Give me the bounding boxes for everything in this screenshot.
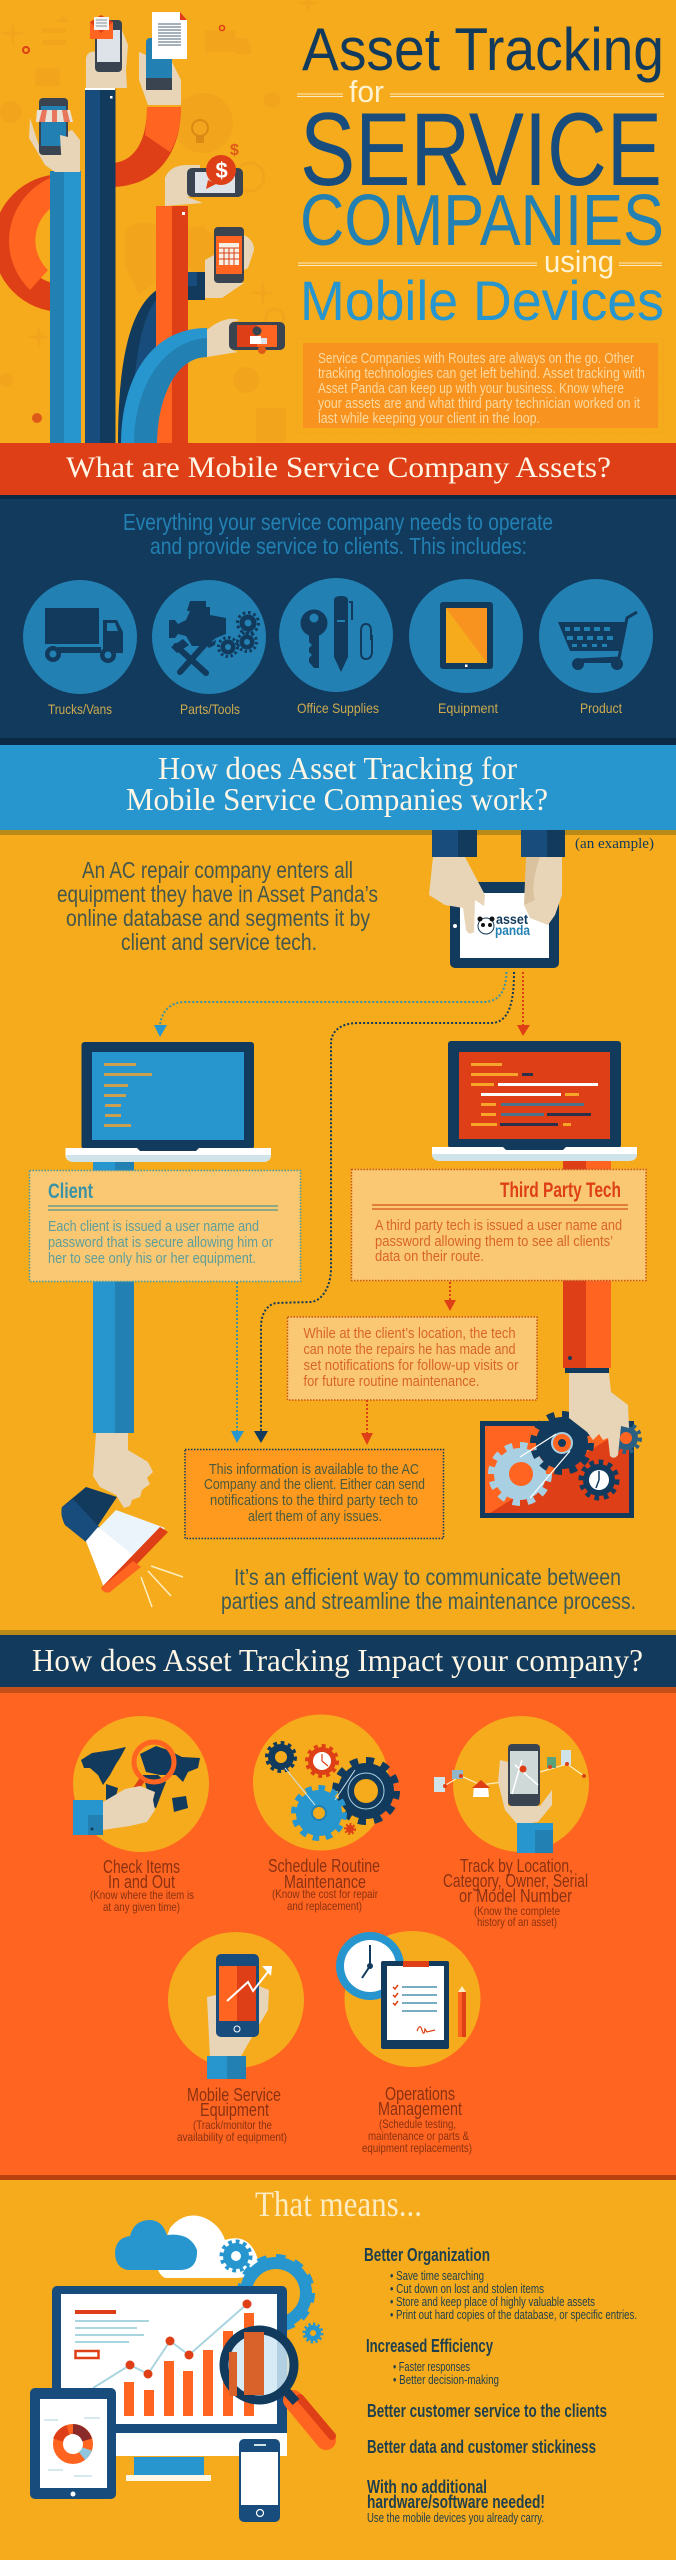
label: track by location: Category, Owner, Serial	[443, 1871, 588, 1891]
label: check items: (Know where the item is	[90, 1888, 194, 1902]
panel: third party tech box: A third party tech is issued a user name and	[375, 1217, 622, 1234]
arrow: tablet to client	[154, 972, 506, 1037]
panel: client box: Client	[48, 1180, 93, 1203]
label: operations management: Operations	[385, 2084, 455, 2104]
icon: tracking phone	[434, 1716, 589, 1853]
label: mobile service equipment: (Track/monitor the	[193, 2118, 272, 2132]
panel: how it works heading band: Mobile Service Companies work?	[126, 781, 548, 817]
icon: clouds and gears	[115, 2216, 322, 2342]
label: schedule maintenance	[268, 1856, 380, 1913]
panel: intro text box: last while keeping your client in the loop.	[318, 411, 540, 427]
text: assets intro: Everything your service company needs to operate	[123, 509, 553, 535]
icon: curved blue arm front	[121, 328, 207, 444]
panel: intro text box	[297, 339, 663, 433]
label: operations management: equipment replacements)	[362, 2141, 472, 2155]
text: better organization: • Store and keep place of highly valuable assets	[390, 2294, 595, 2309]
icon: hands on tablet with logo	[429, 830, 565, 968]
labels: asset names: Product	[580, 700, 622, 716]
text: increased efficiency: • Better decision-making	[393, 2372, 499, 2387]
panel: how it works heading band: How does Asset Tracking for	[158, 750, 517, 786]
icon: hands on tablet with logo: asset	[496, 911, 528, 927]
labels: asset names	[48, 700, 622, 717]
icon: phone with dollar bubble	[165, 155, 243, 206]
label: track by location: history of an asset)	[477, 1915, 557, 1929]
labels: impact items	[90, 1856, 588, 2155]
text: no additional hardware: Use the mobile devices you already carry.	[367, 2510, 544, 2525]
text: example note: (an example)	[575, 836, 654, 852]
panel: technician notes box	[288, 1317, 537, 1400]
panel: shared information box: alert them of any issues.	[248, 1508, 382, 1525]
label: track by location	[443, 1856, 588, 1929]
icon: office supplies	[279, 578, 393, 692]
text: better organization: Better Organization	[364, 2245, 490, 2265]
icon: clock and clipboard	[336, 1931, 480, 2067]
panel: third party tech box: password allowing them to see all clients’	[375, 1233, 613, 1250]
text: no additional hardware: hardware/software needed!	[367, 2492, 545, 2512]
panel: how it works heading band	[0, 745, 676, 835]
label: operations management: Management	[378, 2099, 462, 2119]
icon: phone with document	[139, 12, 187, 105]
title	[297, 16, 664, 332]
icon: gears	[253, 1714, 396, 1850]
icon: parts and tools	[152, 580, 266, 694]
label: schedule maintenance: and replacement)	[287, 1899, 362, 1913]
heading: for with rules: for	[349, 74, 384, 109]
icon: magnifier	[224, 2330, 332, 2440]
heading: using with rules: using	[544, 244, 614, 279]
panel: shared information box: Company and the client. Either can send	[204, 1476, 425, 1493]
text: intro paragraph: An AC repair company enters all	[82, 857, 353, 883]
icon: navy curved arm	[118, 272, 205, 444]
label: check items: at any given time)	[103, 1900, 180, 1914]
icon: arm two navy	[85, 88, 116, 444]
illustration: hands holding phones	[0, 12, 285, 444]
panel: technician notes box: for future routine maintenance.	[304, 1373, 480, 1390]
panel: technician notes box: While at the client’s location, the tech	[304, 1325, 516, 1342]
text: better organization: • Save time searching	[390, 2268, 484, 2283]
label: track by location: or Model Number	[459, 1886, 572, 1906]
label: operations management: (Schedule testing,	[379, 2117, 456, 2131]
panel: client box	[30, 1170, 300, 1282]
text: closing statement: It’s an efficient way to communicate between	[234, 1564, 621, 1590]
text: no additional hardware: With no additional	[367, 2477, 487, 2497]
heading: that means: That means...	[255, 2184, 422, 2224]
arrow: third party to notes	[444, 1282, 456, 1311]
icon: phone with calculator	[205, 227, 254, 298]
panel: that means	[0, 2175, 676, 2560]
panel: shared information box: notifications to the third party tech to	[210, 1492, 418, 1509]
labels: asset names: Office Supplies	[297, 700, 379, 716]
text: increased efficiency: • Faster responses	[393, 2359, 470, 2374]
label: check items: In and Out	[108, 1872, 175, 1892]
panel: third party tech box: Third Party Tech	[500, 1179, 621, 1202]
panel: client box: password that is secure allowing him or	[48, 1234, 273, 1251]
text: no additional hardware	[367, 2477, 545, 2525]
icon: tablet with donut	[30, 2388, 116, 2499]
icon: third party laptop	[432, 1041, 637, 1161]
icon: mobile phone with growth	[168, 1932, 304, 2079]
panel: third party tech box: data on their route.	[375, 1248, 484, 1265]
icon: hands on tablet with logo: panda	[495, 922, 530, 938]
label: mobile service equipment: Mobile Service	[187, 2085, 281, 2105]
label: track by location: (Know the complete	[474, 1904, 560, 1918]
label: check items	[90, 1857, 194, 1914]
icon: red curved arm top	[110, 107, 181, 187]
text: better organization: • Cut down on lost and stolen items	[390, 2281, 544, 2296]
arm: third party sleeve	[563, 1161, 611, 1373]
panel: header background	[0, 0, 676, 444]
arrow: client box to shared box	[231, 1282, 244, 1443]
icon: hand with megaphone	[61, 1433, 183, 1607]
heading: Mobile Devices: Mobile Devices	[300, 269, 664, 332]
label: operations management	[362, 2084, 472, 2155]
panel: assets heading band: What are Mobile Service Company Assets?	[66, 451, 611, 484]
arrow: tablet to shared box	[254, 972, 514, 1443]
text: increased efficiency	[366, 2336, 499, 2387]
label: mobile service equipment: Equipment	[200, 2100, 269, 2120]
labels: asset names: Equipment	[438, 700, 498, 716]
text: increased efficiency: Increased Efficiency	[366, 2336, 493, 2356]
label: schedule maintenance: (Know the cost for repair	[272, 1887, 378, 1901]
label: mobile service equipment	[177, 2085, 287, 2144]
panel: shared information box: This information is available to the AC	[209, 1461, 419, 1478]
text: better organization	[364, 2245, 637, 2322]
icon: arm one blue	[50, 171, 81, 444]
text: intro paragraph	[57, 857, 378, 955]
icon: client laptop	[66, 1042, 271, 1162]
panel: technician notes box: can note the repairs he has made and	[304, 1341, 516, 1358]
panel: how it works	[0, 830, 676, 1630]
panel: technician notes box: set notifications for follow-up visits or	[304, 1357, 519, 1374]
panel: third party tech box	[352, 1170, 646, 1280]
panel: impact	[0, 1693, 676, 2175]
panel: client box: her to see only his or her equipment.	[48, 1250, 256, 1267]
labels: asset names: Trucks/Vans	[48, 701, 112, 717]
icon: truck	[23, 580, 137, 694]
arrow: tablet to third party	[517, 972, 530, 1036]
text: closing statement	[221, 1564, 636, 1614]
panel: shared information box	[185, 1450, 444, 1538]
label: schedule maintenance: Schedule Routine	[268, 1856, 380, 1876]
label: schedule maintenance: Maintenance	[284, 1872, 366, 1892]
panel: impact heading band	[0, 1630, 676, 1693]
icon: phone with envelope	[86, 15, 128, 88]
text: assets intro	[123, 509, 553, 559]
icon: lightbulb and dollar	[23, 26, 266, 423]
icon: arm three orange	[156, 206, 188, 444]
icon: shopping cart	[539, 579, 653, 693]
icon: monitor with chart	[52, 2286, 287, 2481]
icon: phone with truck	[207, 319, 285, 357]
panel: client box: Each client is issued a user name and	[48, 1218, 259, 1235]
icon: phone with market	[29, 98, 80, 172]
icon: world map with magnifier	[73, 1716, 209, 1852]
icon: phone with dollar bubble: $	[216, 158, 228, 183]
panel: assets heading band	[0, 443, 676, 495]
text: better data: Better data and customer stickiness	[367, 2437, 596, 2457]
arm: client sleeve	[93, 1162, 134, 1433]
label: mobile service equipment: availability of equipment)	[177, 2130, 287, 2144]
icon: tablet	[409, 579, 523, 693]
label: check items: Check Items	[103, 1857, 180, 1877]
arrow: notes to shared box	[361, 1400, 373, 1445]
icon: lightbulb and dollar: $	[230, 142, 239, 159]
panel: impact heading band: How does Asset Tracking Impact your company?	[32, 1642, 643, 1678]
text: intro paragraph: online database and segments it by	[66, 905, 370, 931]
icon: phone	[239, 2439, 280, 2522]
text: intro paragraph: equipment they have in Asset Panda’s	[57, 881, 378, 907]
panel: assets	[0, 495, 676, 745]
icon: hand with gears tablet	[480, 1373, 640, 1518]
labels: asset names: Parts/Tools	[180, 701, 240, 717]
icon: red curved arm left	[0, 174, 62, 312]
label: track by location: Track by Location,	[460, 1856, 573, 1876]
text: assets intro: and provide service to clients. This includes:	[150, 533, 527, 559]
label: operations management: maintenance or parts &	[368, 2129, 469, 2143]
text: intro paragraph: client and service tech.	[121, 929, 317, 955]
